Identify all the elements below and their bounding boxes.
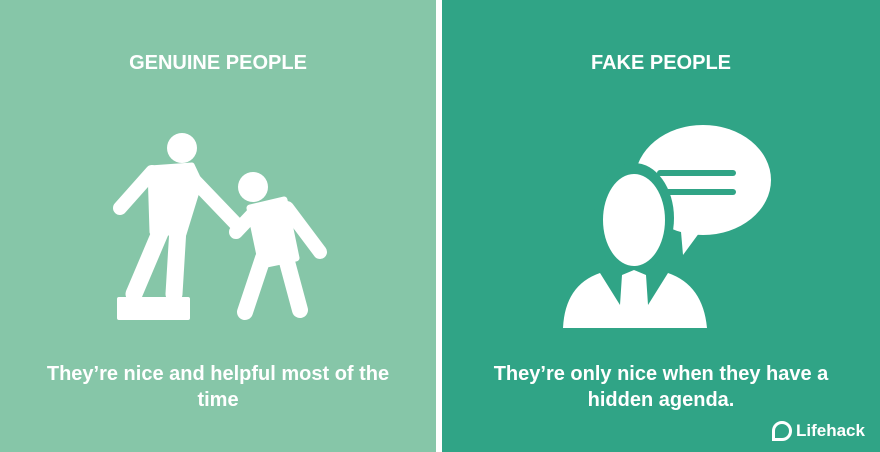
text: genuine description: They’re nice and helpful most of the: [47, 363, 389, 385]
panel: genuine people: [0, 0, 436, 452]
icon: helping hand figures: [113, 133, 327, 320]
text: genuine description: time: [197, 389, 239, 411]
text: genuine description: [47, 363, 389, 411]
text: fake description: [494, 363, 828, 411]
logo: lifehack: Lifehack: [796, 421, 865, 440]
text: fake description: They’re only nice when they have a: [494, 363, 828, 385]
panel: fake people: [442, 0, 880, 452]
text: fake description: hidden agenda.: [588, 389, 734, 411]
heading: fake people: FAKE PEOPLE: [591, 52, 731, 74]
heading: genuine people: GENUINE PEOPLE: [129, 52, 307, 74]
icon: person with speech bubble: [563, 125, 771, 328]
